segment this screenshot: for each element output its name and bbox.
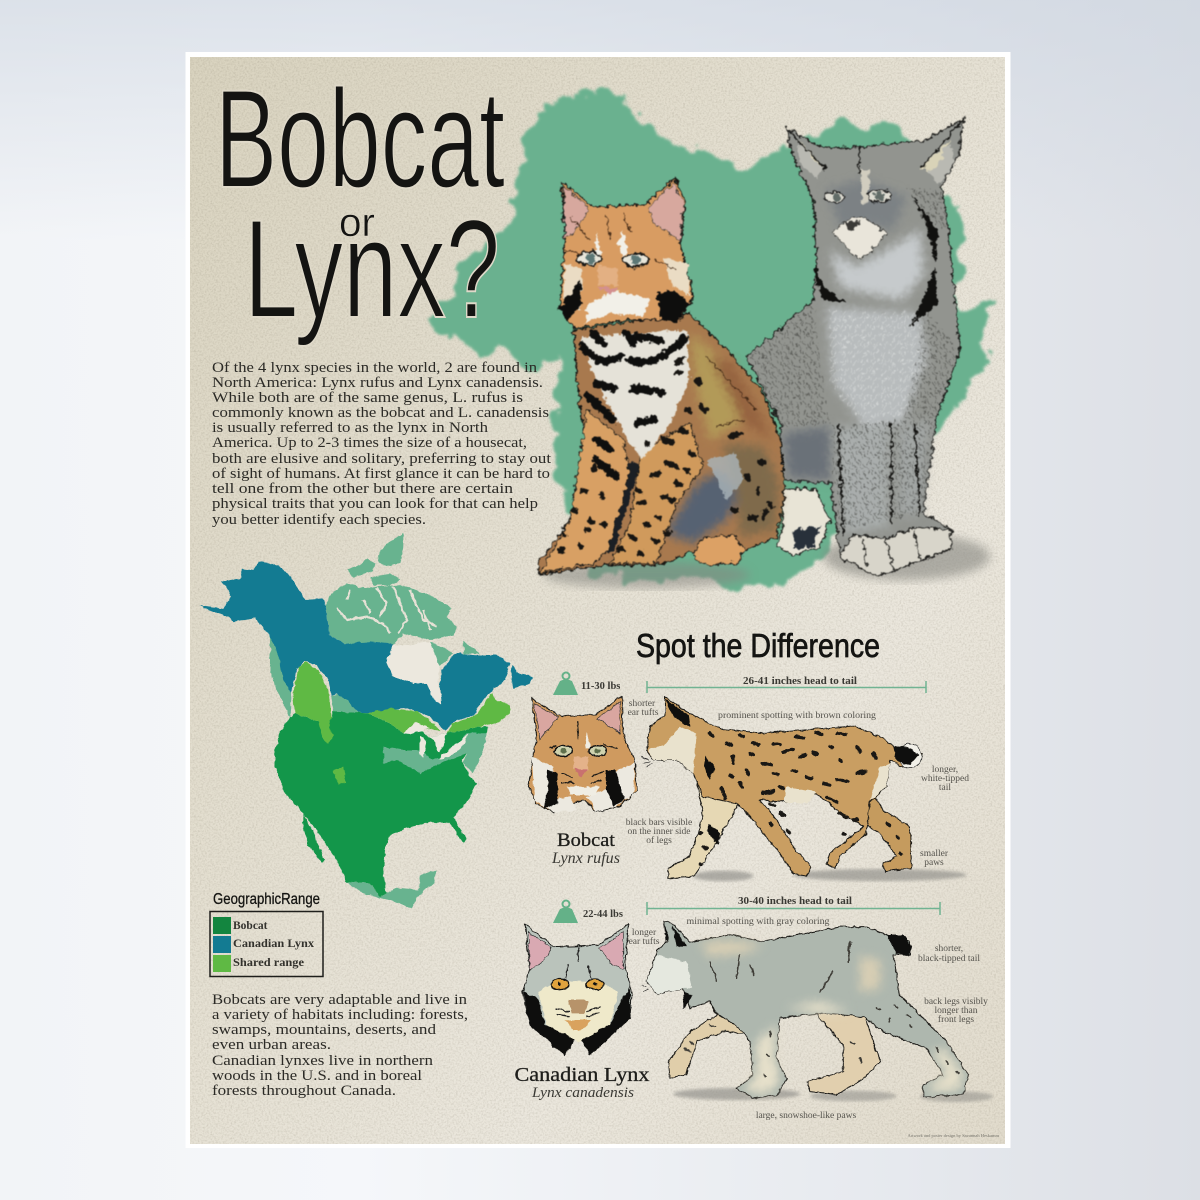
lynx weight icon and label <box>553 900 623 923</box>
lynx length bar <box>647 896 940 915</box>
lynx names: Canadian Lynx <box>514 1064 650 1086</box>
intro text block: you better identify each species. <box>212 512 426 528</box>
poster: white frame and paper <box>186 52 1010 1148</box>
habitat text block: swamps, mountains, deserts, and <box>212 1022 437 1038</box>
map: lynx-free northern zone <box>270 533 480 908</box>
intro text block: While both are of the same genus, L. rufus is <box>212 390 523 406</box>
intro text block: both are elusive and solitary, preferring to stay out <box>212 451 551 467</box>
bobcat length bar: 26-41 inches head to tail <box>743 676 857 687</box>
lynx annotations: black-tipped tail <box>918 954 980 964</box>
legend: geographic range: Shared range <box>233 957 304 969</box>
lynx weight icon and label: 22-44 lbs <box>583 909 623 920</box>
bobcat annotations: ear tufts <box>628 707 659 718</box>
habitat text block: forests throughout Canada. <box>212 1083 396 1099</box>
lynx annotations: ear tufts <box>629 936 660 947</box>
lynx annotations: longer than <box>934 1006 978 1016</box>
map: North America geographic range <box>198 533 533 908</box>
map: southern Great Lakes margin <box>383 733 487 773</box>
lynx annotations <box>629 917 988 1121</box>
legend: geographic range: Canadian Lynx <box>233 938 314 950</box>
lynx names: Lynx canadensis <box>531 1085 634 1101</box>
intro text block <box>212 360 551 528</box>
bobcat annotations <box>626 699 969 868</box>
lynx names <box>514 1064 650 1101</box>
habitat text block: Canadian lynxes live in northern <box>212 1053 434 1069</box>
illustration: sitting bobcat <box>538 178 784 588</box>
intro text block: tell one from the other but there are certain <box>212 481 514 497</box>
title: or <box>339 201 375 245</box>
habitat text block: even urban areas. <box>212 1037 331 1053</box>
intro text block: North America: Lynx rufus and Lynx canadensis. <box>212 375 543 391</box>
intro text block: America. Up to 2-3 times the size of a housecat, <box>212 435 527 451</box>
lynx face <box>523 924 632 1055</box>
lynx annotations: large, snowshoe-like paws <box>756 1111 856 1121</box>
bobcat length bar <box>647 676 926 693</box>
map: bobcat range <box>275 712 488 897</box>
walking lynx illustration <box>642 922 993 1102</box>
walking bobcat illustration <box>642 697 967 881</box>
bobcat annotations: paws <box>924 858 944 868</box>
lynx annotations: back legs visibly <box>924 997 988 1007</box>
bobcat annotations: tail <box>939 783 951 793</box>
heading: spot the difference: Spot the Difference <box>636 627 880 664</box>
habitat text block: woods in the U.S. and in boreal <box>212 1068 422 1084</box>
intro text block: commonly known as the bobcat and L. canadensis <box>212 405 549 421</box>
lynx annotations: longer <box>632 928 657 938</box>
bobcat names: Bobcat <box>557 830 616 851</box>
bobcat names: Lynx rufus <box>551 850 620 867</box>
bobcat names <box>551 830 620 867</box>
bobcat annotations: of legs <box>646 835 672 846</box>
lynx annotations: shorter, <box>935 944 963 954</box>
habitat text block: a variety of habitats including: forests, <box>212 1007 468 1023</box>
title <box>215 60 505 347</box>
lynx annotations: minimal spotting with gray coloring <box>686 917 830 927</box>
habitat text block <box>212 992 468 1099</box>
green watercolor wash <box>430 88 990 585</box>
map: shared range <box>293 663 510 785</box>
bobcat annotations: longer, <box>932 765 958 775</box>
intro text block: is usually referred to as the lynx in North <box>212 420 489 436</box>
illustration: sitting lynx <box>747 118 990 580</box>
bobcat annotations: shorter <box>629 699 656 709</box>
habitat text block: Bobcats are very adaptable and live in <box>212 992 468 1008</box>
intro text block: Of the 4 lynx species in the world, 2 are found in <box>212 360 538 376</box>
bobcat annotations: smaller <box>920 849 949 859</box>
map: Great Lakes and Hudson Bay <box>387 642 468 759</box>
bobcat annotations: white-tipped <box>921 774 969 784</box>
map: Canadian lynx range <box>198 562 533 731</box>
legend: geographic range: Bobcat <box>233 920 268 932</box>
artist credit: Artwork and poster design by Savannah Heskamm <box>908 1133 999 1138</box>
intro text block: physical traits that you can look for that can help <box>212 496 538 512</box>
map: arctic water channels <box>337 587 437 633</box>
bobcat annotations: prominent spotting with brown coloring <box>718 711 876 721</box>
intro text block: of sight of humans. At first glance it can be hard to <box>212 466 550 482</box>
lynx annotations: front legs <box>938 1014 974 1025</box>
legend: geographic range: GeographicRange <box>213 891 320 908</box>
bobcat annotations: on the inner side <box>627 827 691 837</box>
title: Bobcat <box>215 60 505 217</box>
legend: geographic range <box>210 891 323 976</box>
bobcat annotations: black bars visible <box>626 818 692 828</box>
title: Lynx? <box>244 190 500 347</box>
lynx length bar: 30-40 inches head to tail <box>738 896 852 907</box>
bobcat face <box>528 697 637 813</box>
bobcat weight icon and label: 11-30 lbs <box>581 681 620 692</box>
bobcat weight icon and label <box>553 672 620 695</box>
